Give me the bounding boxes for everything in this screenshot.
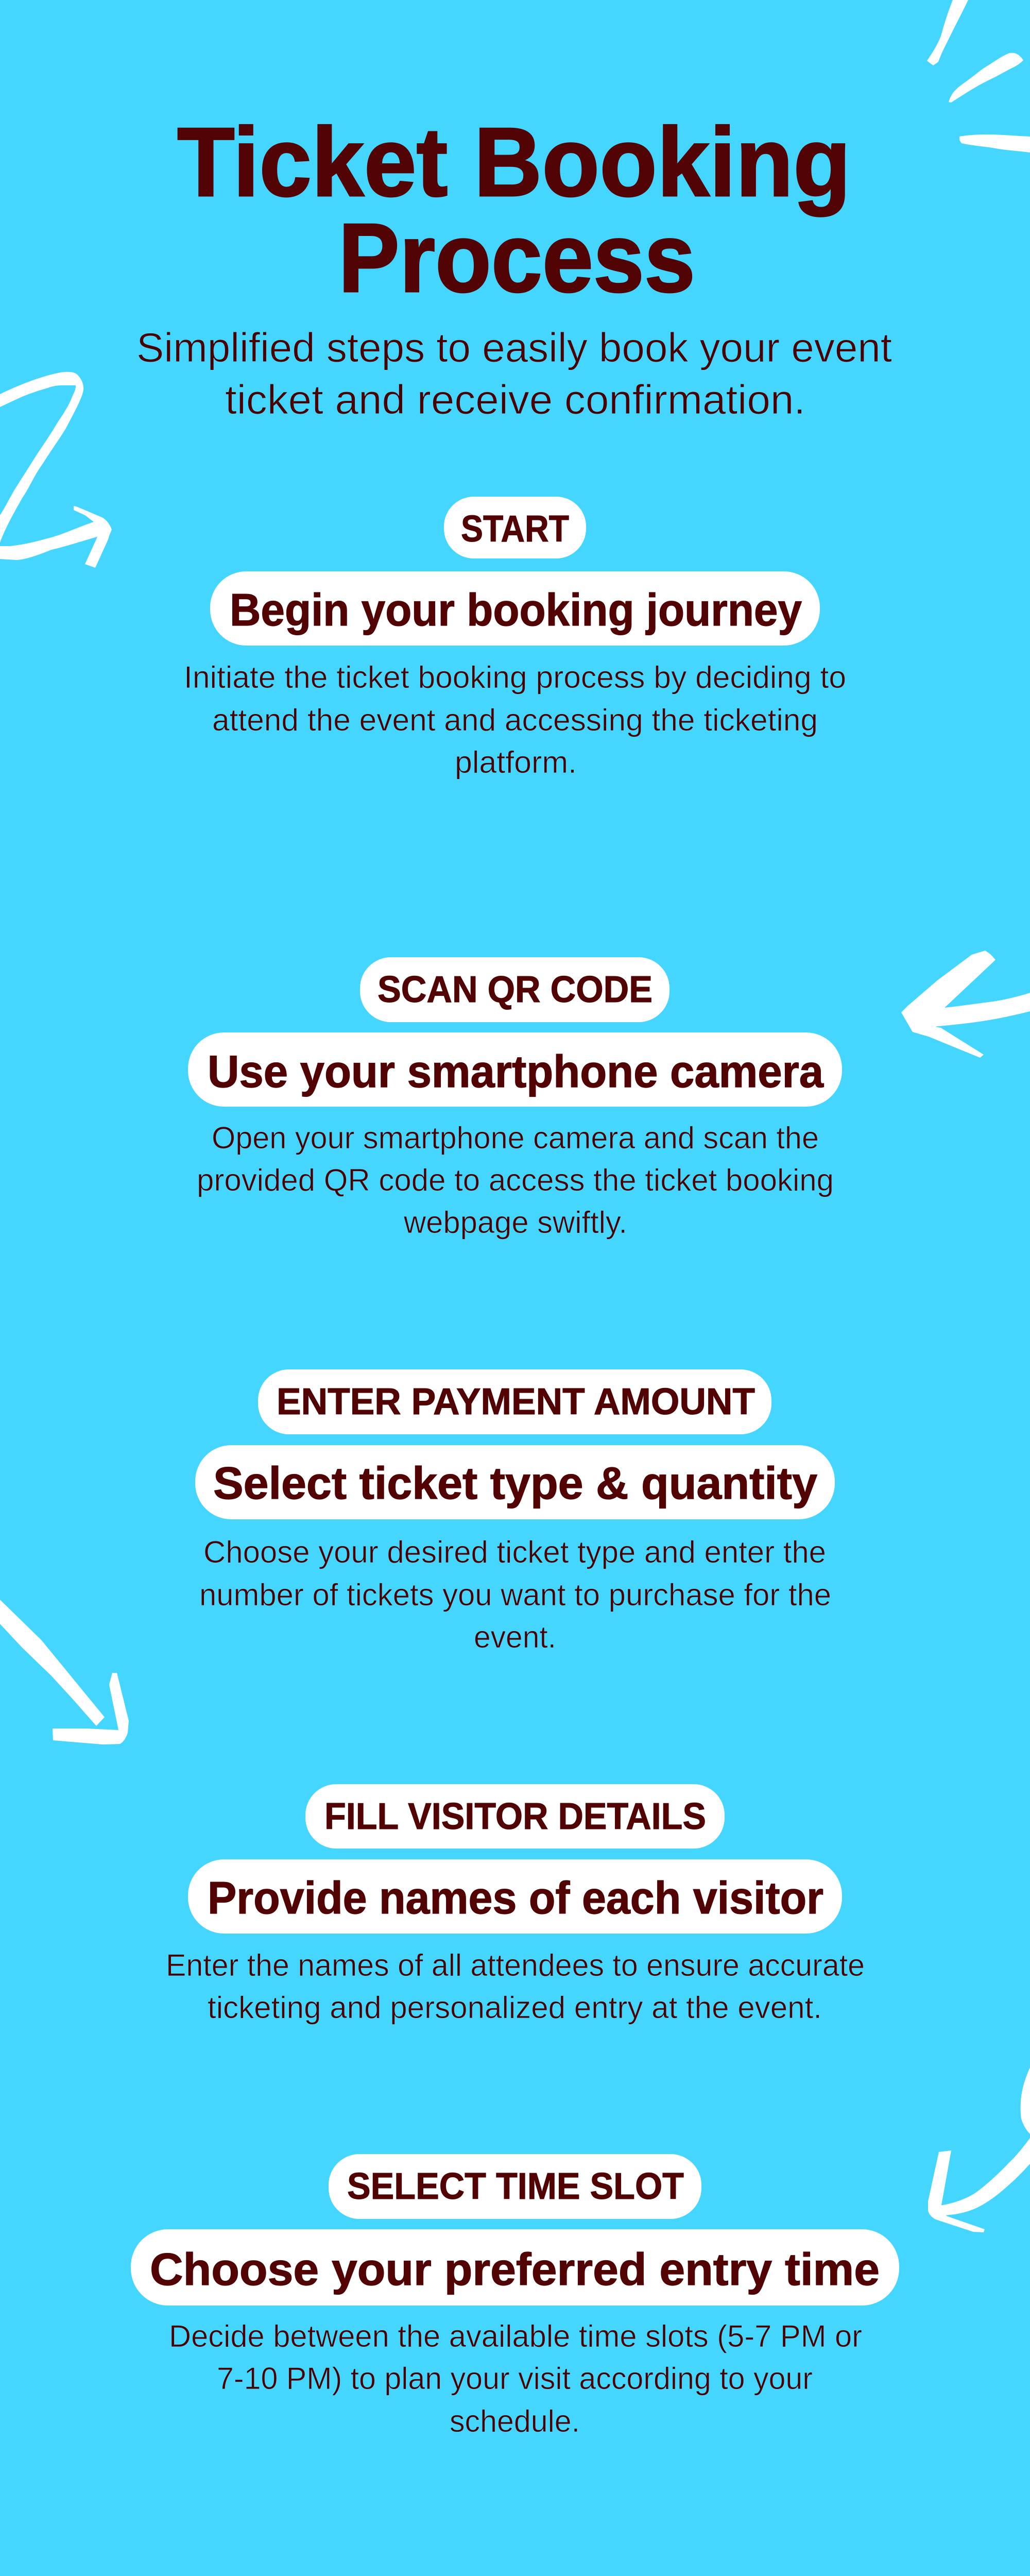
panel: step 4 fill visitor details: [166, 1784, 865, 2025]
panel: step 2 scan QR code: [188, 957, 842, 1240]
title: Ticket Booking: [177, 108, 851, 217]
step heading: select ticket type and quantity: Select ticket type & quantity: [213, 1458, 817, 1509]
step label: START: [444, 497, 586, 558]
step label: START: START: [461, 509, 569, 550]
step label: SCAN QR CODE: [360, 957, 670, 1022]
subtitle: ticket and receive confirmation.: [225, 377, 805, 422]
step label: SELECT TIME SLOT: SELECT TIME SLOT: [347, 2166, 684, 2207]
step description: Choose your desired ticket type and enter the: [203, 1535, 826, 1569]
arrow: top-left looping arrow: [0, 372, 112, 568]
step description: platform.: [455, 745, 577, 779]
step label: FILL VISITOR DETAILS: FILL VISITOR DETAILS: [324, 1796, 706, 1837]
step description: [184, 660, 846, 779]
step label: SELECT TIME SLOT: [329, 2154, 701, 2219]
step description: ticketing and personalized entry at the event.: [208, 1990, 822, 2025]
step description: number of tickets you want to purchase for the: [199, 1578, 831, 1612]
step description: Initiate the ticket booking process by deciding to: [184, 660, 846, 694]
subtitle: [136, 325, 892, 422]
step description: [169, 2319, 862, 2438]
step description: attend the event and accessing the ticketing: [212, 703, 818, 737]
step description: Open your smartphone camera and scan the: [212, 1121, 819, 1155]
step description: schedule.: [450, 2404, 580, 2438]
step heading: choose your preferred entry time: Choose your preferred entry time: [150, 2244, 880, 2295]
title: [177, 108, 851, 313]
step description: [166, 1948, 865, 2025]
step description: [199, 1535, 831, 1654]
icon: top-right brush dashes: [927, 0, 1030, 152]
panel: step 1 start: [184, 497, 846, 779]
title: Process: [338, 204, 695, 313]
step description: webpage swiftly.: [403, 1205, 627, 1240]
step heading: use your smartphone camera: Use your smartphone camera: [208, 1046, 824, 1097]
step heading: select ticket type and quantity: [195, 1445, 835, 1519]
step heading: choose your preferred entry time: [131, 2229, 899, 2306]
step label: FILL VISITOR DETAILS: [305, 1784, 725, 1849]
step heading: begin your booking journey: Begin your booking journey: [230, 584, 802, 635]
step heading: use your smartphone camera: [188, 1032, 842, 1107]
step heading: provide names of each visitor: [188, 1859, 842, 1934]
step description: 7-10 PM) to plan your visit according to your: [217, 2361, 813, 2396]
step label: SCAN QR CODE: SCAN QR CODE: [377, 969, 653, 1010]
step label: ENTER PAYMENT AMOUNT: [258, 1369, 771, 1434]
step description: Enter the names of all attendees to ensure accurate: [166, 1948, 865, 1982]
arrow: right side arrow pointing left: [901, 951, 1030, 1058]
step label: ENTER PAYMENT AMOUNT: ENTER PAYMENT AMOUNT: [277, 1381, 755, 1422]
step description: provided QR code to access the ticket booking: [197, 1163, 834, 1197]
subtitle: Simplified steps to easily book your event: [136, 325, 892, 370]
step heading: provide names of each visitor: Provide names of each visitor: [208, 1872, 823, 1923]
step heading: begin your booking journey: [210, 571, 820, 646]
step description: [197, 1121, 834, 1240]
panel: step 3 enter payment amount: [195, 1369, 835, 1654]
step description: Decide between the available time slots (5-7 PM or: [169, 2319, 862, 2353]
panel: step 5 select time slot: [131, 2154, 899, 2438]
arrow: left side arrow pointing down-right: [0, 1600, 129, 1744]
arrow: bottom-right curved arrow: [928, 2067, 1030, 2232]
step description: event.: [474, 1620, 556, 1654]
